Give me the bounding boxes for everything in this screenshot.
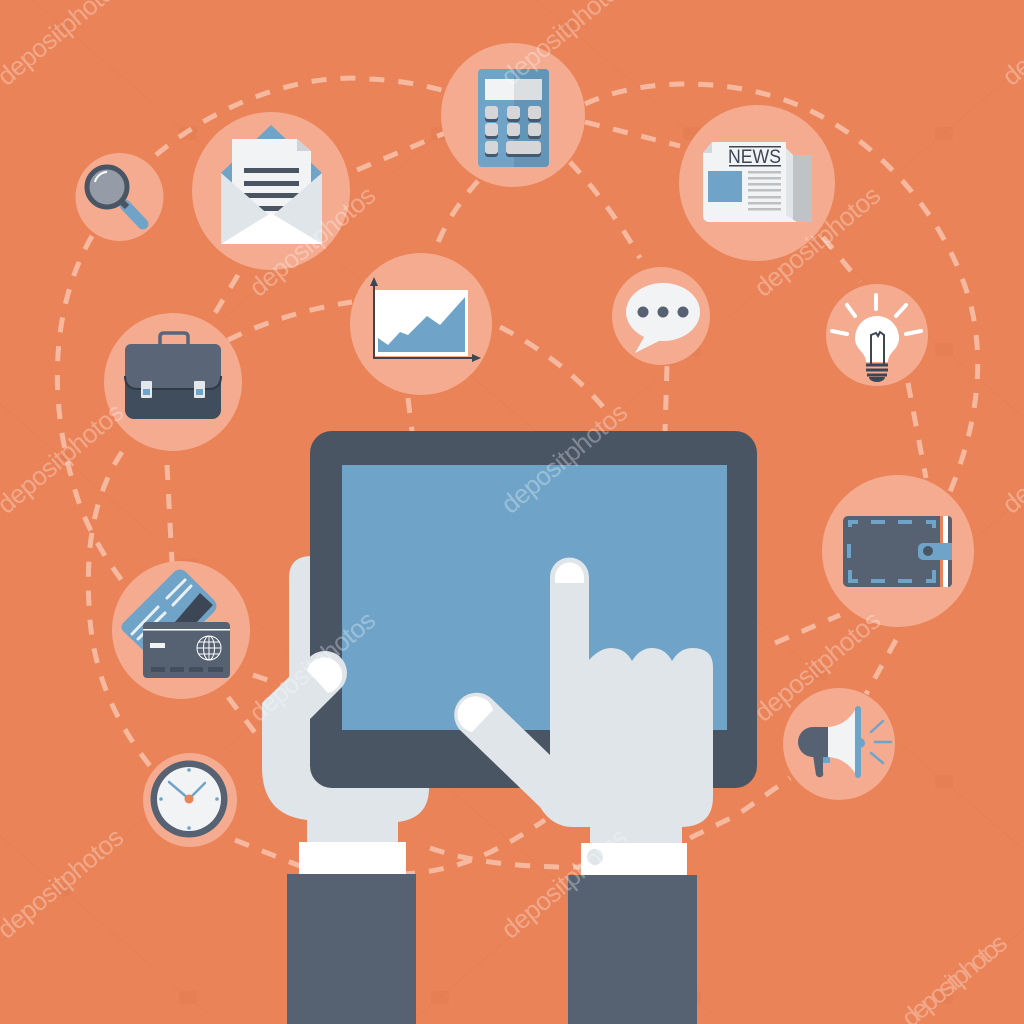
right shirt cuff xyxy=(581,843,687,876)
stock watermarks: depositphotos xyxy=(495,397,633,519)
index fingernail xyxy=(555,562,584,583)
right sleeve xyxy=(568,875,697,1024)
left hand behind tablet xyxy=(262,556,429,843)
icon: clock xyxy=(143,753,237,847)
thumb nail xyxy=(458,696,493,732)
left sleeve xyxy=(287,874,416,1024)
icon: newspaper xyxy=(679,105,835,261)
icon: calculator xyxy=(441,43,585,187)
icon: wallet xyxy=(822,475,974,627)
tablet xyxy=(310,431,757,788)
icon: light bulb xyxy=(826,284,928,386)
icon: megaphone xyxy=(783,688,895,800)
icon: credit cards xyxy=(112,561,250,699)
right hand pointing xyxy=(454,558,713,843)
stock watermarks: depositphotos xyxy=(748,180,886,302)
tablet screen xyxy=(342,465,727,730)
stock watermarks: depositphotos xyxy=(495,822,633,944)
stock watermarks: depositphotos xyxy=(748,605,886,727)
icon: envelope with letter xyxy=(192,112,350,270)
cuff button xyxy=(587,849,603,865)
icon: line chart xyxy=(350,253,492,395)
dashed connector network xyxy=(57,78,978,874)
news label: NEWS xyxy=(728,147,781,168)
icon: briefcase xyxy=(104,313,242,451)
left shirt cuff xyxy=(299,842,406,874)
icon: magnifier xyxy=(76,153,164,241)
stock watermarks: depositphotos xyxy=(243,605,381,727)
icon: chat bubble xyxy=(612,267,710,365)
stock watermarks: depositphotos xyxy=(243,180,381,302)
left thumb with nail xyxy=(285,657,342,713)
